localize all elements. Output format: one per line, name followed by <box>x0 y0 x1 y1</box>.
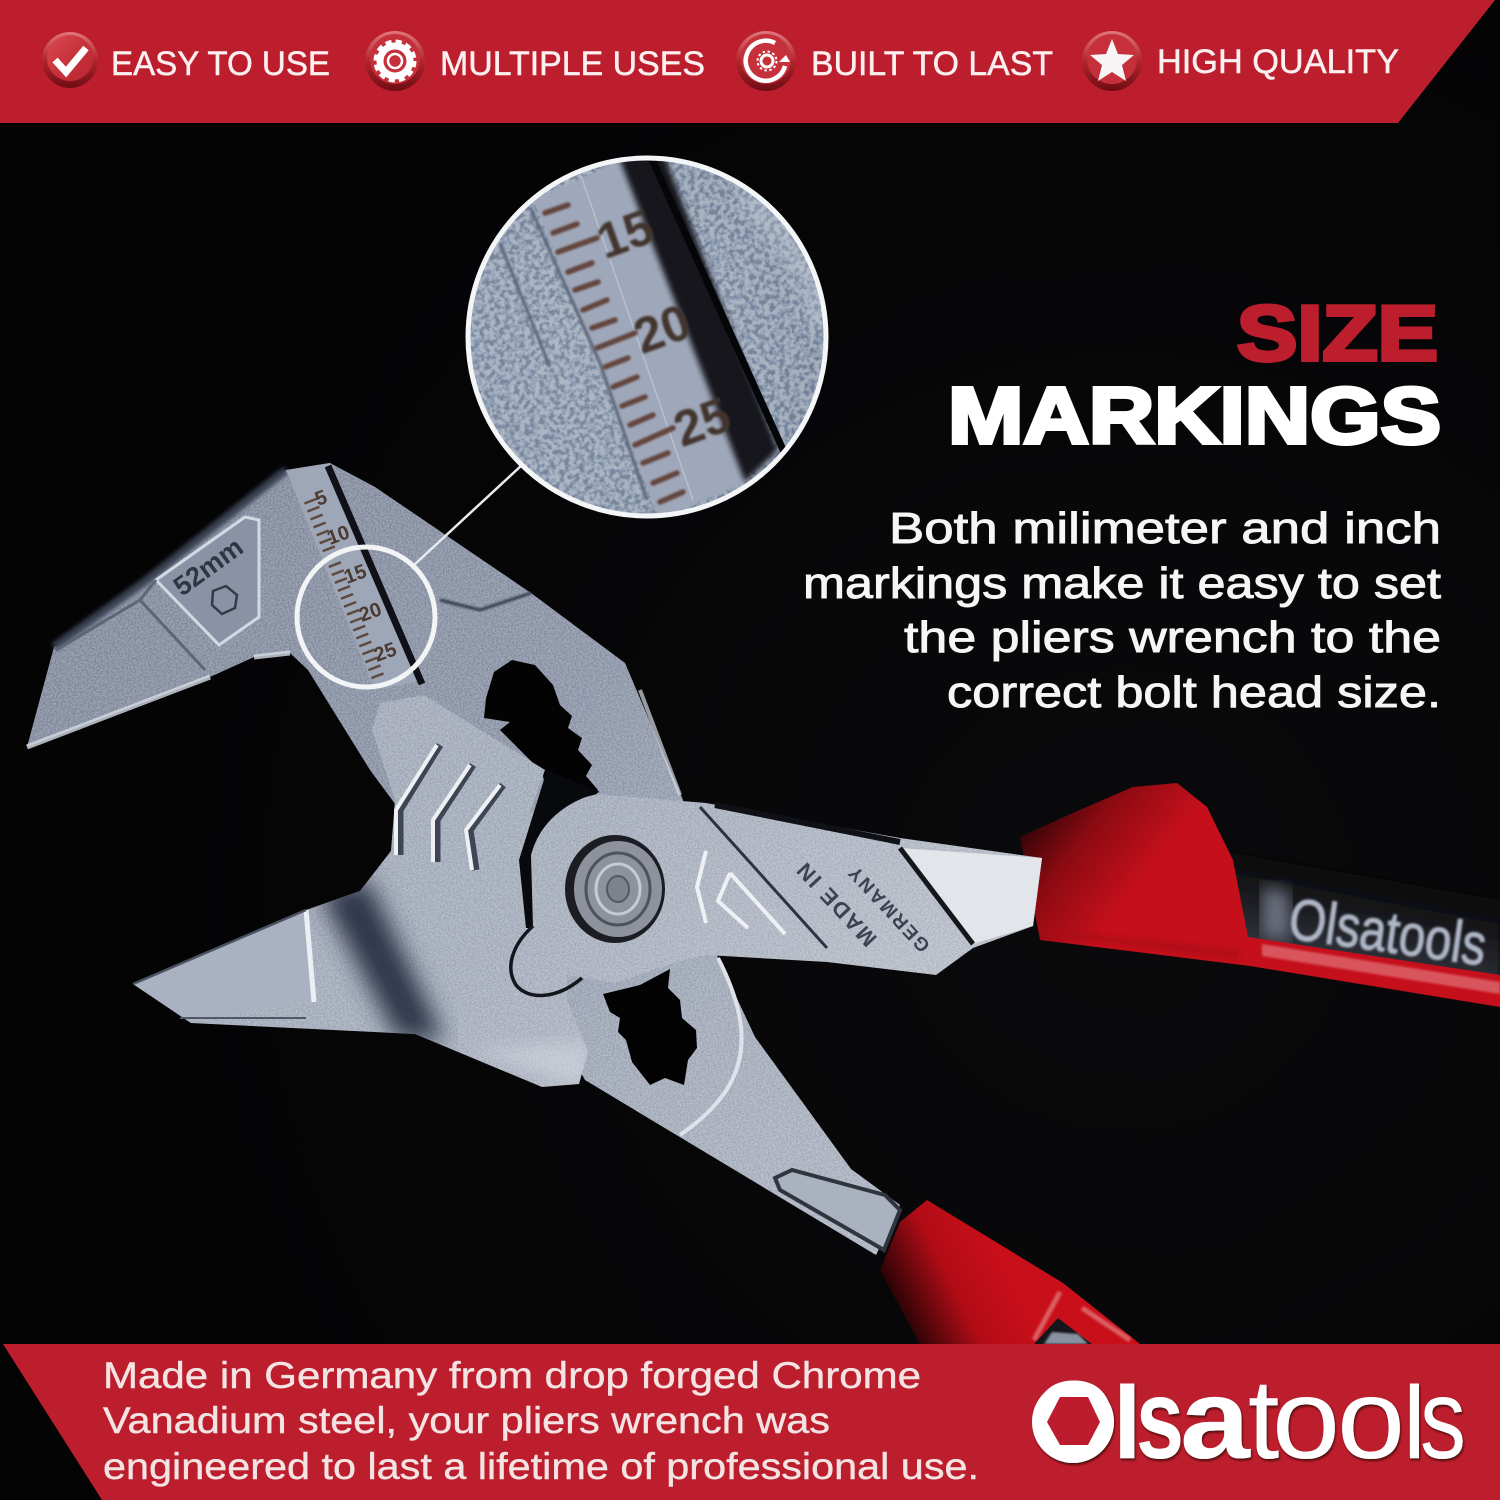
lower teeth slot <box>603 969 697 1085</box>
scale strip with tick marks: 5 <box>312 486 330 511</box>
bottom text: Made in Germany from drop forged Chrome <box>103 1355 921 1396</box>
lens: engraved lines <box>500 207 647 500</box>
magnified lens: scale detail <box>465 155 830 520</box>
small magnifier ring <box>297 547 435 687</box>
label: multiple uses: MULTIPLE USES <box>440 45 705 83</box>
label: high quality: HIGH QUALITY <box>1157 43 1399 81</box>
icon: check <box>42 32 98 88</box>
bottom text: Vanadium steel, your pliers wrench was <box>103 1400 830 1441</box>
bottom red banner <box>3 1344 1500 1500</box>
bottom text: engineered to last a lifetime of professional use. <box>103 1446 979 1487</box>
lower red handle <box>880 1200 1140 1344</box>
fixed jaw and lower arm <box>27 463 900 1255</box>
lens: scale numbers: 20 <box>626 293 698 365</box>
upper red handle with logo <box>1020 783 1500 1007</box>
heading: size markings: MARKINGS <box>948 371 1441 460</box>
magnifier connector line <box>414 465 522 565</box>
logo: Olsatools: O <box>1032 1359 1116 1482</box>
heading: size markings <box>948 289 1441 460</box>
description text: Both milimeter and inch <box>889 504 1441 553</box>
upper teeth slot <box>484 660 598 825</box>
pivot plate gap and outline <box>519 770 600 928</box>
lower arm ridge <box>680 958 742 1135</box>
lower arm end block <box>775 1170 900 1250</box>
scale strip with tick marks <box>286 463 425 690</box>
description text <box>803 504 1441 717</box>
size recess with 52mm mark <box>156 517 259 645</box>
lens: scale strip <box>533 155 750 520</box>
scale strip with tick marks: 20 <box>356 598 385 627</box>
logo: Olsatools: l <box>1403 1365 1426 1480</box>
MADE IN GERMANY stamp <box>790 856 935 956</box>
scale strip with tick marks: 10 <box>324 521 353 550</box>
lens: tick marks <box>545 205 683 502</box>
photo: pliers wrench <box>27 463 1500 1344</box>
icon: cycle <box>736 31 796 91</box>
heading: size markings: SIZE <box>1237 289 1438 377</box>
logo: Olsatools <box>1032 1356 1466 1482</box>
top red banner <box>0 0 1495 123</box>
logo: Olsatools: a <box>1180 1356 1251 1482</box>
icon: star <box>1082 31 1142 91</box>
logo: Olsatools: s <box>1136 1356 1184 1482</box>
logo: Olsatools: t <box>1248 1356 1279 1482</box>
label: built to last: BUILT TO LAST <box>811 45 1053 83</box>
logo: Olsatools: s <box>1420 1356 1466 1482</box>
scale strip with tick marks: 15 <box>341 560 370 589</box>
MADE IN GERMANY stamp: GERMANY <box>844 860 935 956</box>
description text: markings make it easy to set <box>803 559 1441 608</box>
icon: gear <box>365 31 425 91</box>
moving jaw and upper handle <box>133 695 1042 1090</box>
handle logo mark <box>697 851 785 934</box>
description text: correct bolt head size. <box>947 668 1441 717</box>
lens: scale numbers <box>597 209 730 448</box>
handle tip <box>900 848 1042 944</box>
lens: scale numbers: 25 <box>666 386 738 458</box>
jaw tip facet <box>133 910 312 1023</box>
lens: scale numbers: 15 <box>589 198 661 270</box>
pivot bolt <box>565 835 665 943</box>
description text: the pliers wrench to the <box>904 613 1441 662</box>
size recess with 52mm mark: 52mm <box>168 532 249 602</box>
MADE IN GERMANY stamp: MADE IN <box>790 856 882 952</box>
grip ridges <box>396 745 503 870</box>
jaw highlight edge <box>27 653 290 747</box>
logo: Olsatools: o <box>1272 1356 1340 1482</box>
bottom text <box>103 1355 979 1487</box>
logo: Olsatools: l <box>1113 1365 1142 1480</box>
label: easy to use: EASY TO USE <box>111 45 330 83</box>
scale strip with tick marks: 25 <box>371 638 400 667</box>
logo: Olsatools: o <box>1337 1356 1405 1482</box>
